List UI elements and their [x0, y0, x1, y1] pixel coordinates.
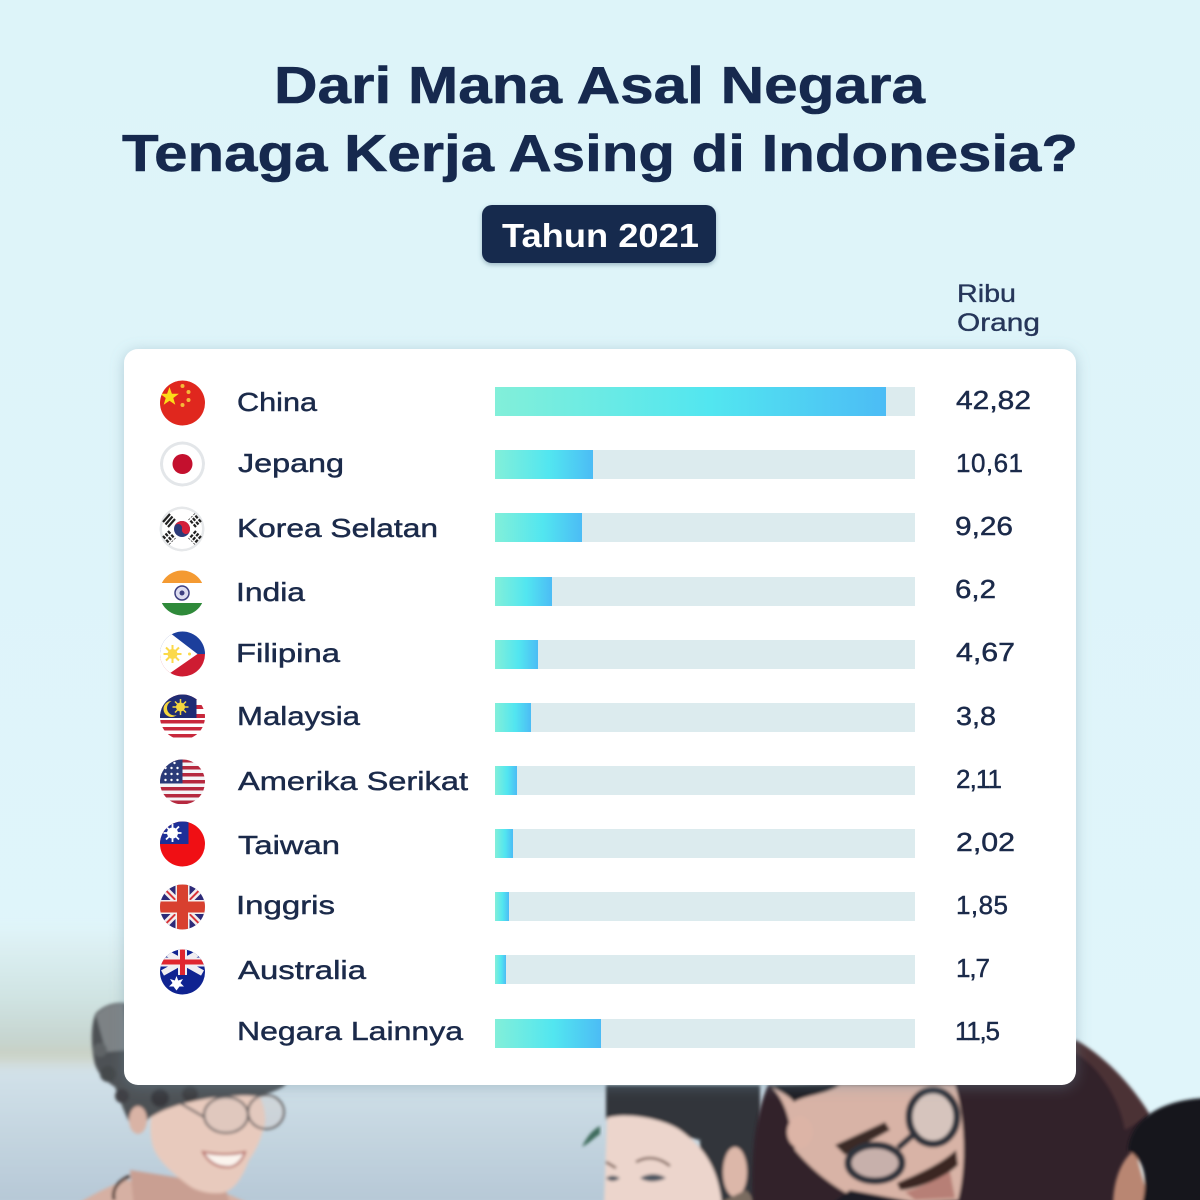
- title line 1: Dari Mana Asal Negara: [274, 57, 926, 115]
- label: Korea Selatan: [237, 513, 438, 543]
- icon: UK flag: [160, 884, 206, 930]
- value: 3,8: [956, 701, 996, 731]
- bar: [495, 703, 915, 732]
- bar: [495, 1019, 915, 1048]
- bar: [495, 450, 915, 479]
- card background: [124, 349, 1076, 1085]
- icon: Philippines flag: [160, 632, 205, 676]
- label: China: [237, 387, 318, 417]
- icon: South Korea flag: [160, 506, 204, 552]
- year badge: Tahun 2021: [502, 217, 699, 254]
- icon: USA flag: [160, 759, 206, 805]
- row: Korea Selatan: [160, 506, 1013, 552]
- icon: India flag: [162, 570, 202, 616]
- unit label: Orang: [957, 309, 1040, 337]
- person: man with glasses in maroon hoodie: [752, 1040, 1150, 1200]
- title line 2: Tenaga Kerja Asing di Indonesia?: [122, 125, 1078, 183]
- bar: [495, 513, 915, 542]
- person: man in foreground right: [1113, 1098, 1200, 1200]
- bar: [495, 387, 915, 416]
- label: Negara Lainnya: [237, 1016, 464, 1046]
- icon: Taiwan flag: [160, 821, 206, 867]
- value: 9,26: [955, 511, 1013, 541]
- year badge: [482, 205, 716, 263]
- person: woman with dark hair: [604, 1085, 762, 1200]
- value: 2,11: [956, 764, 1002, 794]
- label: Filipina: [236, 638, 341, 668]
- value: 1,7: [956, 953, 990, 983]
- row: Amerika Serikat: [160, 759, 1002, 805]
- photo backdrop: [0, 930, 780, 1200]
- photo: people working at the bottom: [0, 930, 1200, 1200]
- row: Malaysia: [160, 694, 996, 740]
- bar: [495, 955, 915, 984]
- label: Malaysia: [237, 701, 361, 731]
- plant leaf: [582, 1126, 600, 1147]
- value: 2,02: [956, 827, 1015, 857]
- bar: [495, 829, 915, 858]
- icon: Malaysia flag: [160, 694, 206, 740]
- label: Inggris: [236, 890, 335, 920]
- row: Inggris: [160, 884, 1008, 930]
- row: Taiwan: [160, 821, 1015, 867]
- bar: [495, 640, 915, 669]
- label: Taiwan: [238, 830, 340, 860]
- label: Jepang: [238, 448, 344, 478]
- bar: [495, 577, 915, 606]
- title: [122, 57, 1078, 183]
- icon: Japan flag: [160, 442, 205, 486]
- person: smiling woman with glasses: [60, 1003, 300, 1200]
- icon: China flag: [160, 380, 206, 426]
- value: 11,5: [955, 1016, 1000, 1046]
- value: 4,67: [956, 637, 1015, 667]
- row: Jepang: [160, 442, 1023, 486]
- value: 6,2: [955, 574, 996, 604]
- value: 42,82: [956, 385, 1031, 415]
- unit label: Ribu: [957, 280, 1016, 308]
- row: China: [160, 380, 1031, 426]
- row: India: [159, 570, 996, 616]
- row: Negara Lainnya: [237, 1016, 1000, 1048]
- label: Australia: [238, 955, 367, 985]
- row: Filipina: [160, 632, 1014, 676]
- icon: Australia flag: [160, 949, 206, 995]
- row: Australia: [160, 949, 990, 995]
- panel: chart card: [124, 349, 1076, 1085]
- bar: [495, 892, 915, 921]
- value: 10,61: [956, 448, 1023, 478]
- label: India: [236, 577, 306, 607]
- label: Amerika Serikat: [238, 766, 469, 796]
- bar: [495, 766, 915, 795]
- value: 1,85: [956, 890, 1008, 920]
